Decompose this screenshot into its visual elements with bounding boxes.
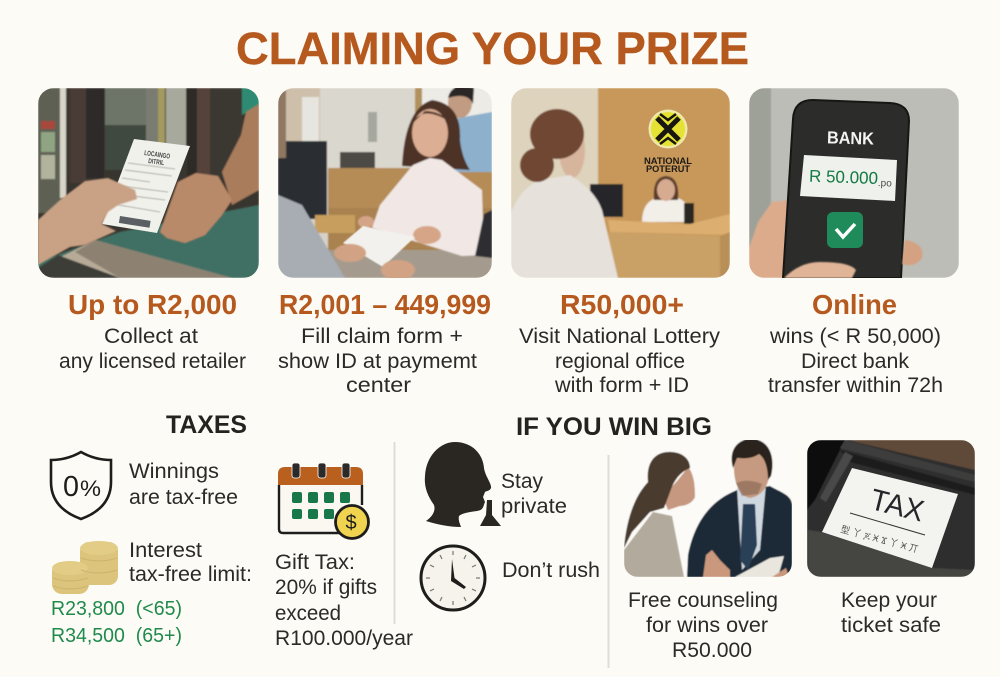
- photo: National Lottery regional office: [511, 88, 730, 278]
- lottery ticket: LOCAINGO: [144, 150, 171, 161]
- step 4: online: [768, 289, 943, 397]
- icon: clock: [421, 546, 485, 610]
- lottery logo: [648, 110, 688, 148]
- lottery ticket: [102, 139, 190, 233]
- text: stay private: Stay: [501, 470, 543, 493]
- icon: shield 0%: 0: [63, 471, 79, 503]
- text: free counseling: Free counseling: [628, 589, 778, 612]
- step 2: R2,001 to 449,999: Fill claim form +: [301, 325, 463, 348]
- text: don't rush: Don’t rush: [502, 559, 600, 582]
- step 3: R50,000+: [519, 289, 721, 397]
- sign text: NATIONAL: [644, 156, 692, 167]
- photo: ticket handed over at retailer: [38, 88, 259, 278]
- text: keep ticket safe: Keep your: [841, 589, 937, 612]
- step 1: up to R2,000: Collect at: [104, 325, 198, 348]
- text: stay private: [501, 470, 567, 518]
- icon: calendar with dollar coin: $: [346, 512, 357, 534]
- text: stay private: private: [501, 495, 567, 518]
- paper form: [343, 226, 415, 267]
- icon: shield 0%: [51, 452, 111, 519]
- text: gift tax: [275, 551, 413, 650]
- step 4: online: Direct bank: [801, 350, 909, 373]
- phone: [783, 100, 909, 278]
- text: keep ticket safe: ticket safe: [841, 614, 941, 637]
- photo: phone with bank transfer: [749, 88, 959, 278]
- text: interest limit: tax-free limit:: [129, 563, 252, 586]
- text: winnings tax-free: [129, 460, 238, 509]
- ticket card: TAX: [867, 483, 927, 528]
- sign text: [644, 158, 692, 172]
- step 1: up to R2,000: any licensed retailer: [59, 350, 246, 373]
- step 3: R50,000+: with form + ID: [554, 374, 689, 397]
- step 4: online: Online: [812, 289, 897, 320]
- text: interest limit: Interest: [129, 539, 202, 562]
- text: keep ticket safe: [841, 589, 941, 637]
- text: free counseling: R50.000: [672, 639, 752, 662]
- title: CLAIMING YOUR PRIZE: [236, 23, 749, 74]
- step 4: online: wins (< R 50,000): [769, 325, 941, 348]
- icon: coins: [52, 541, 118, 594]
- step 4: online: transfer within 72h: [768, 374, 943, 397]
- photo: claim form at payment center: [278, 86, 492, 280]
- step 1: up to R2,000: [59, 289, 246, 373]
- ticket card: [822, 468, 958, 568]
- text: winnings tax-free: are tax-free: [129, 486, 238, 509]
- step 1: up to R2,000: Up to R2,000: [68, 289, 237, 320]
- icon: calendar with dollar coin: [278, 463, 368, 538]
- text: free counseling: for wins over: [646, 614, 768, 637]
- hand: [784, 240, 922, 278]
- photo: free counseling: [624, 439, 792, 577]
- step 2: R2,001 to 449,999: center: [346, 374, 411, 397]
- step 3: R50,000+: R50,000+: [560, 289, 684, 320]
- icon: head with finger to lips: [425, 442, 501, 527]
- step 3: R50,000+: Visit National Lottery: [519, 325, 721, 348]
- heading: taxes: TAXES: [166, 411, 247, 439]
- text: gift tax: Gift Tax:: [275, 551, 355, 574]
- icon: shield 0%: %: [80, 476, 101, 501]
- text: winnings tax-free: Winnings: [129, 460, 219, 483]
- text: free counseling: [628, 589, 778, 662]
- step 3: R50,000+: regional office: [555, 350, 685, 373]
- phone: .po: [878, 178, 892, 189]
- heading: if you win big: IF YOU WIN BIG: [516, 413, 712, 441]
- text: gift tax: exceed: [275, 602, 341, 625]
- phone: R 50.000: [809, 167, 878, 188]
- interest thresholds: R23,800 (<65): [51, 598, 182, 620]
- lottery ticket: DITRIL: [148, 158, 165, 167]
- text: gift tax: 20% if gifts: [275, 576, 377, 599]
- phone: BANK: [827, 127, 875, 149]
- sign text: POTERUT: [646, 164, 690, 175]
- interest thresholds: R34,500 (65+): [51, 625, 182, 647]
- text: interest limit: [129, 539, 252, 586]
- ticket card: 型 丫 ጆ Ӿ Ϫ 丫 Ӿ 丌: [839, 524, 919, 556]
- step 2: R2,001 to 449,999: show ID at paymemt: [278, 350, 477, 373]
- step 2: R2,001 to 449,999: R2,001 – 449,999: [279, 289, 491, 320]
- photo: ticket in wallet: [807, 440, 975, 577]
- text: gift tax: R100.000/year: [275, 627, 413, 650]
- step 2: R2,001 to 449,999: [278, 289, 491, 397]
- interest thresholds: [51, 598, 182, 647]
